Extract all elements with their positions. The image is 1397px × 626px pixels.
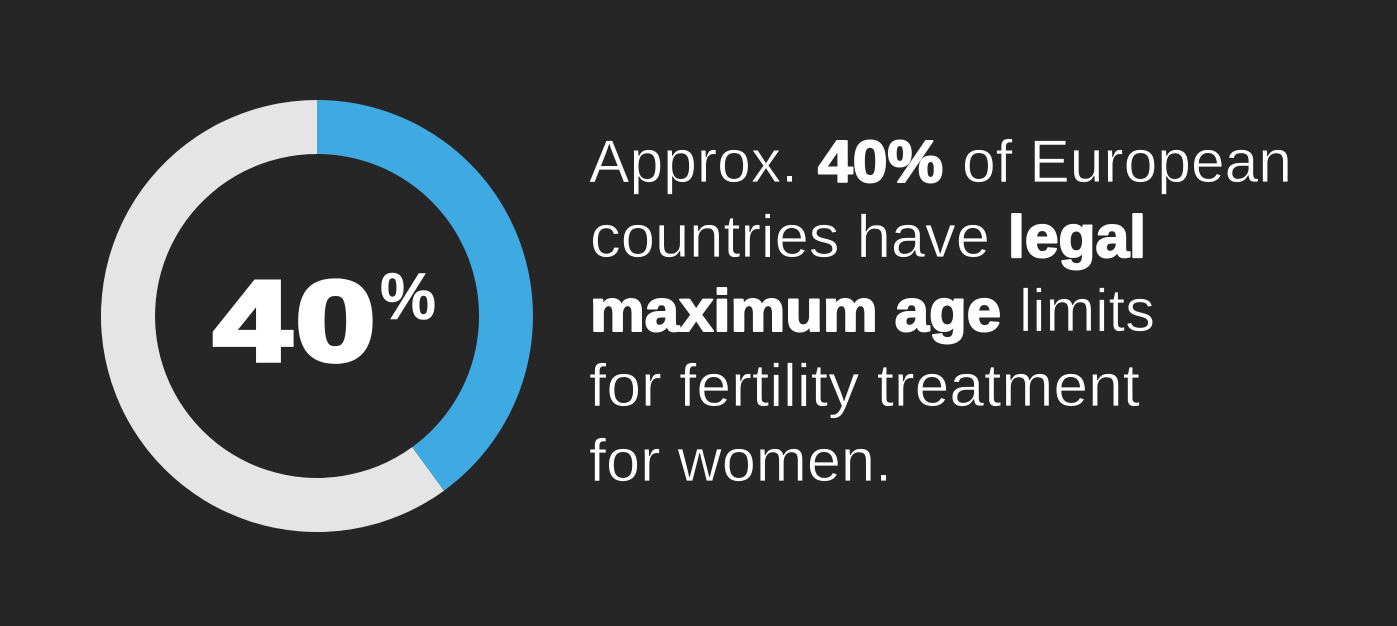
number 40: 0 — [296, 258, 375, 384]
line 1 — [589, 128, 1292, 195]
line 5: for women. — [589, 427, 892, 494]
line 4: for fertility treatment — [589, 352, 1140, 419]
line 1: 40% — [818, 129, 943, 195]
donut centre value — [214, 258, 436, 384]
line 3 — [590, 277, 1155, 344]
donut highlighted 40 percent segment — [317, 100, 533, 491]
donut chart: 40 percent — [101, 100, 533, 532]
number 40: 4 — [214, 258, 291, 384]
line 3: limits — [1019, 277, 1155, 344]
number 40 — [214, 258, 375, 384]
line 2: countries have — [590, 203, 990, 270]
donut remainder segment — [101, 100, 444, 532]
line 3: maximum age — [590, 278, 1001, 344]
line 1: Approx. — [589, 128, 798, 195]
line 1: of European — [962, 128, 1292, 195]
line 2: legal — [1008, 204, 1146, 270]
percent sign: % — [380, 259, 436, 333]
statement text — [589, 128, 1292, 494]
